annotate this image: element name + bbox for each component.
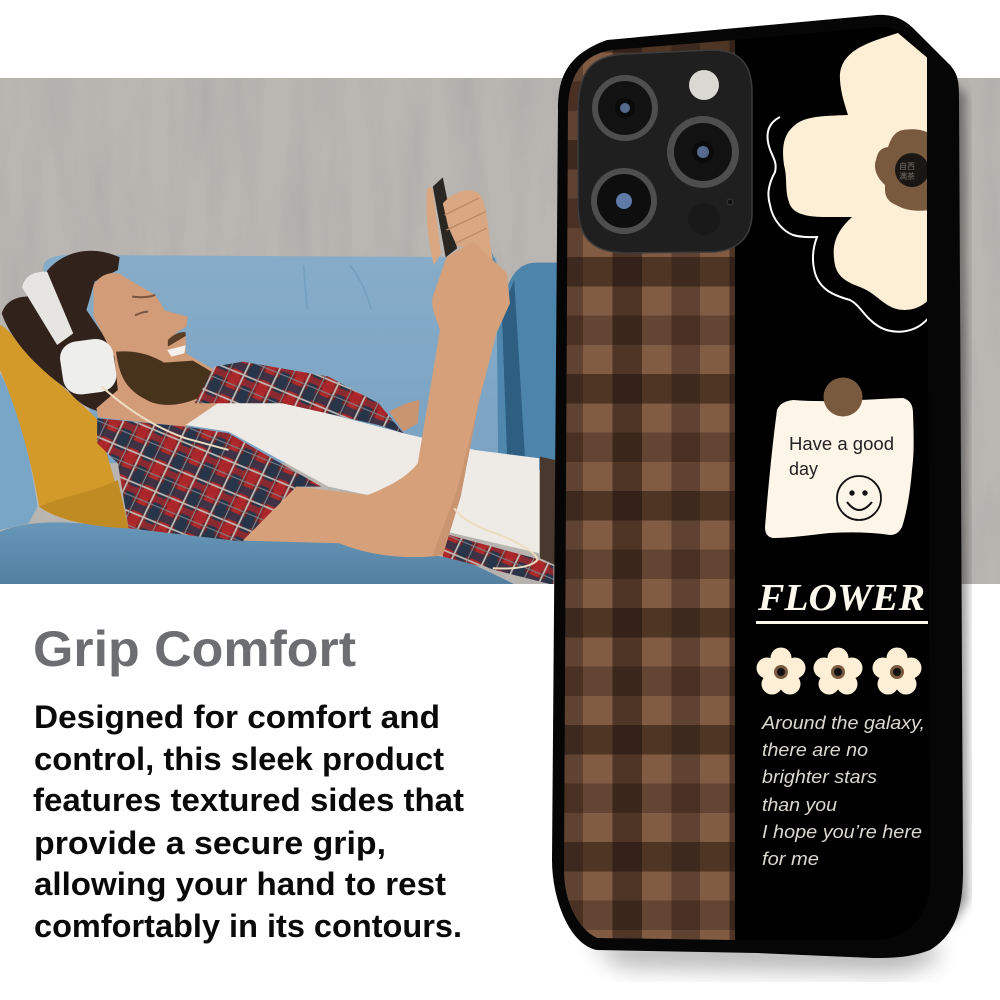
flower outline squiggle — [768, 117, 930, 332]
case poem text — [761, 712, 925, 869]
small flower 3 — [872, 648, 922, 694]
flash — [689, 70, 719, 100]
plaid shirt body — [97, 418, 321, 542]
audio cable — [102, 387, 537, 569]
small flower 2 — [814, 648, 862, 694]
flower seal: 满茶 — [899, 171, 915, 181]
camera module — [578, 50, 752, 253]
sofa left arm — [0, 373, 37, 530]
note text: day — [789, 459, 818, 479]
case poem text: I hope you’re here — [762, 821, 922, 842]
pin — [824, 378, 862, 416]
case poem text: there are no — [762, 739, 868, 760]
thumb behind phone — [427, 187, 441, 265]
photo: man on sofa — [0, 177, 557, 585]
plaid lower hem — [443, 533, 554, 585]
smiley face — [837, 476, 881, 520]
large flower artwork — [768, 33, 930, 332]
body text block: provide a secure grip, — [34, 825, 386, 861]
neck and face — [94, 273, 221, 427]
phone in hand — [433, 177, 457, 257]
small flower 1 — [756, 648, 806, 694]
sofa seat — [0, 522, 516, 585]
lens top left — [592, 75, 658, 141]
body text block — [33, 699, 464, 944]
smile — [167, 345, 186, 357]
note text: Have a good — [789, 434, 894, 454]
body text block: comfortably in its contours. — [34, 908, 462, 944]
body text block: features textured sides that — [33, 782, 464, 818]
white t-shirt — [186, 402, 539, 553]
body text block: Designed for comfort and — [34, 699, 440, 735]
phone case — [552, 15, 963, 958]
headphones cup — [60, 339, 116, 394]
sofa right arm — [508, 262, 557, 470]
three small flowers — [756, 648, 922, 694]
case poem text: for me — [762, 848, 819, 869]
flower centre — [875, 129, 930, 211]
jeans and belt — [540, 457, 555, 565]
brow and eye — [132, 295, 155, 315]
sofa back — [43, 255, 504, 463]
body text block: allowing your hand to rest — [34, 866, 446, 902]
case poem text: than you — [762, 794, 837, 815]
photo: concrete wall — [0, 78, 1000, 584]
lens bottom left — [591, 168, 657, 234]
microphone — [727, 199, 733, 205]
flower seal: 自西 — [899, 161, 915, 171]
yellow cushion — [0, 325, 129, 528]
flower heading: FLOWER — [757, 577, 925, 619]
hair — [2, 251, 125, 412]
case body — [552, 15, 963, 958]
phone drop shadow — [590, 80, 968, 972]
rear forearm — [389, 400, 420, 432]
brown plaid strip — [560, 30, 736, 945]
case poem text: Around the galaxy, — [761, 712, 925, 733]
headphones band — [22, 272, 73, 345]
flower petals — [783, 33, 930, 310]
sticky note — [765, 378, 914, 538]
shirt collar — [195, 362, 404, 433]
lens right — [667, 116, 739, 188]
fingers — [443, 190, 493, 261]
heading: Grip Comfort: Grip Comfort — [33, 621, 356, 677]
panel: lifestyle photo — [0, 78, 1000, 585]
black art panel — [735, 27, 930, 940]
case poem text: brighter stars — [762, 766, 877, 787]
arm and front hand — [243, 242, 510, 557]
body text block: control, this sleek product — [34, 741, 444, 777]
note text — [789, 434, 894, 479]
sensor — [688, 203, 720, 235]
beard — [116, 351, 211, 405]
flower seal — [895, 153, 929, 187]
